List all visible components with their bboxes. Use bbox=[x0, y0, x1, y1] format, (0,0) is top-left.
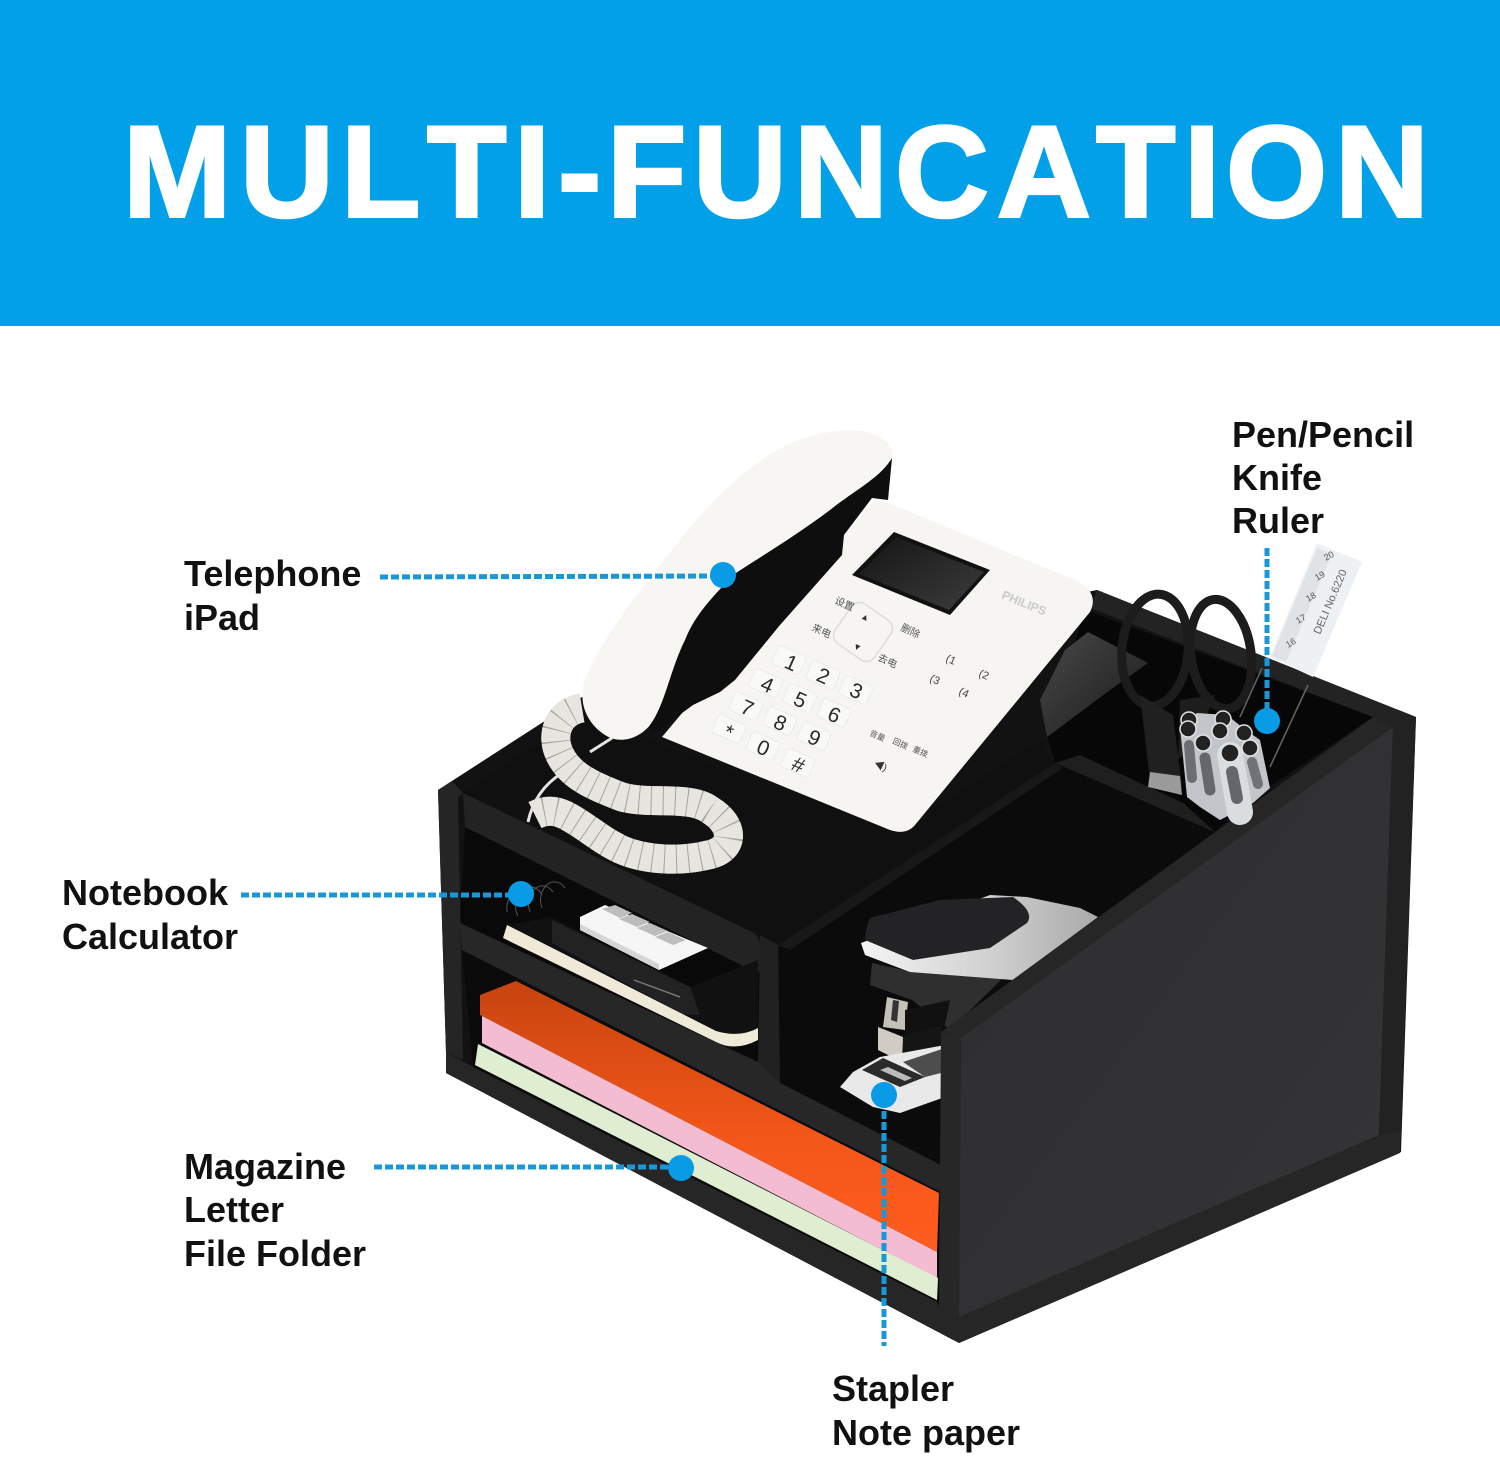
right edge strip bbox=[1379, 717, 1416, 1135]
navigation keys: 音量 bbox=[868, 728, 887, 743]
callout: telephone: Telephone bbox=[184, 553, 361, 594]
side panel front post bbox=[939, 1032, 961, 1317]
slanted central face bbox=[778, 763, 1215, 1170]
back top band bbox=[1090, 590, 1416, 727]
navigation keys: ◀) bbox=[872, 758, 889, 774]
compartment divider bbox=[1055, 755, 1215, 832]
callout: notebook: Calculator bbox=[62, 916, 238, 957]
middle shelf band bbox=[460, 923, 941, 1192]
callout: magazine: Magazine bbox=[184, 1146, 346, 1187]
callout: magazine: File Folder bbox=[184, 1233, 366, 1274]
callout: pen, knife, ruler: Ruler bbox=[1232, 500, 1324, 541]
key outlines bbox=[711, 645, 874, 778]
keypad: 6 bbox=[824, 703, 844, 728]
lower bay interior bbox=[462, 950, 939, 1304]
navigation keys bbox=[810, 595, 930, 774]
phone rest wedge bbox=[1040, 632, 1148, 737]
keypad: * bbox=[720, 721, 737, 745]
pink paper bbox=[482, 1016, 937, 1278]
keypad: # bbox=[788, 753, 808, 778]
keypad: (2 bbox=[977, 668, 991, 683]
navigation keys: 来电 bbox=[810, 621, 833, 641]
orange paper bbox=[480, 981, 939, 1252]
keypad: 9 bbox=[804, 726, 824, 751]
callout: stapler bbox=[832, 1082, 1020, 1453]
stapler bbox=[840, 895, 1098, 1113]
callout: magazine: Letter bbox=[184, 1189, 284, 1230]
keypad: 3 bbox=[846, 679, 866, 704]
side panel bbox=[959, 727, 1393, 1317]
callout: magazine bbox=[184, 1146, 694, 1274]
ruler: 17 bbox=[1294, 612, 1308, 626]
centre divider bbox=[758, 935, 780, 1085]
title: MULTI-FUNCATION bbox=[123, 98, 1429, 244]
handset bbox=[582, 430, 892, 740]
keypad: 2 bbox=[813, 664, 833, 689]
pen compartment interior bbox=[1047, 610, 1373, 832]
organizer body bbox=[438, 590, 1416, 1343]
ruler bbox=[1240, 543, 1362, 767]
keypad: (3 bbox=[928, 673, 942, 688]
keypad: (1 bbox=[944, 653, 958, 668]
bottom lip bbox=[446, 1052, 959, 1343]
side panel slanted edge bbox=[941, 717, 1393, 1038]
ruler: 20 bbox=[1322, 549, 1336, 563]
notebook bbox=[503, 882, 758, 1047]
ruler: 18 bbox=[1304, 590, 1318, 604]
ruler: 16 bbox=[1284, 636, 1298, 650]
navigation keys: ▼ bbox=[851, 641, 863, 653]
callout: pen, knife, ruler: Pen/Pencil bbox=[1232, 414, 1414, 455]
organizer product illustration bbox=[438, 430, 1416, 1343]
navigation keys: 回拨 bbox=[891, 736, 910, 751]
green paper bbox=[475, 1044, 938, 1300]
brand: PHILIPS bbox=[1000, 588, 1048, 618]
ruler: 19 bbox=[1313, 569, 1327, 583]
phone base bbox=[662, 498, 1093, 832]
tray top surface bbox=[463, 712, 1055, 945]
slanted partition edge bbox=[778, 763, 1063, 950]
callout: notebook: Notebook bbox=[62, 872, 229, 913]
callout: pen, knife, ruler: Knife bbox=[1232, 457, 1322, 498]
keypad: 4 bbox=[757, 673, 777, 698]
navigation keys: 重拨 bbox=[911, 744, 930, 759]
navigation keys: 删除 bbox=[899, 621, 922, 641]
header banner bbox=[0, 0, 1500, 326]
telephone bbox=[582, 430, 1093, 832]
pens bbox=[1180, 711, 1270, 820]
callout: notebook bbox=[62, 872, 534, 957]
upper bay interior bbox=[460, 827, 760, 1062]
callout: pen, knife, ruler bbox=[1232, 414, 1414, 734]
navigation keys: 去电 bbox=[876, 651, 899, 671]
keypad bbox=[720, 651, 991, 778]
side base lip bbox=[959, 1130, 1401, 1343]
navigation keys: ▲ bbox=[859, 611, 871, 623]
keypad: (4 bbox=[957, 686, 971, 701]
callout: telephone: iPad bbox=[184, 597, 260, 638]
ruler: DELI No.6220 bbox=[1312, 568, 1350, 636]
callout: stapler: Stapler bbox=[832, 1368, 954, 1409]
callout: telephone bbox=[184, 553, 736, 638]
keypad: 0 bbox=[753, 736, 773, 761]
scissors bbox=[1117, 591, 1258, 795]
telephone cord bbox=[528, 708, 729, 859]
left post bbox=[438, 781, 463, 1060]
navigation keys: 设置 bbox=[833, 595, 856, 614]
tray front strip bbox=[463, 793, 760, 972]
keypad: 8 bbox=[770, 711, 790, 736]
calculator bbox=[580, 905, 708, 970]
keypad: 5 bbox=[790, 688, 810, 713]
keypad: 1 bbox=[781, 651, 801, 676]
keypad: 7 bbox=[737, 696, 757, 721]
callout: stapler: Note paper bbox=[832, 1412, 1020, 1453]
handset cradle bbox=[640, 458, 892, 735]
phone screen bbox=[852, 532, 990, 615]
